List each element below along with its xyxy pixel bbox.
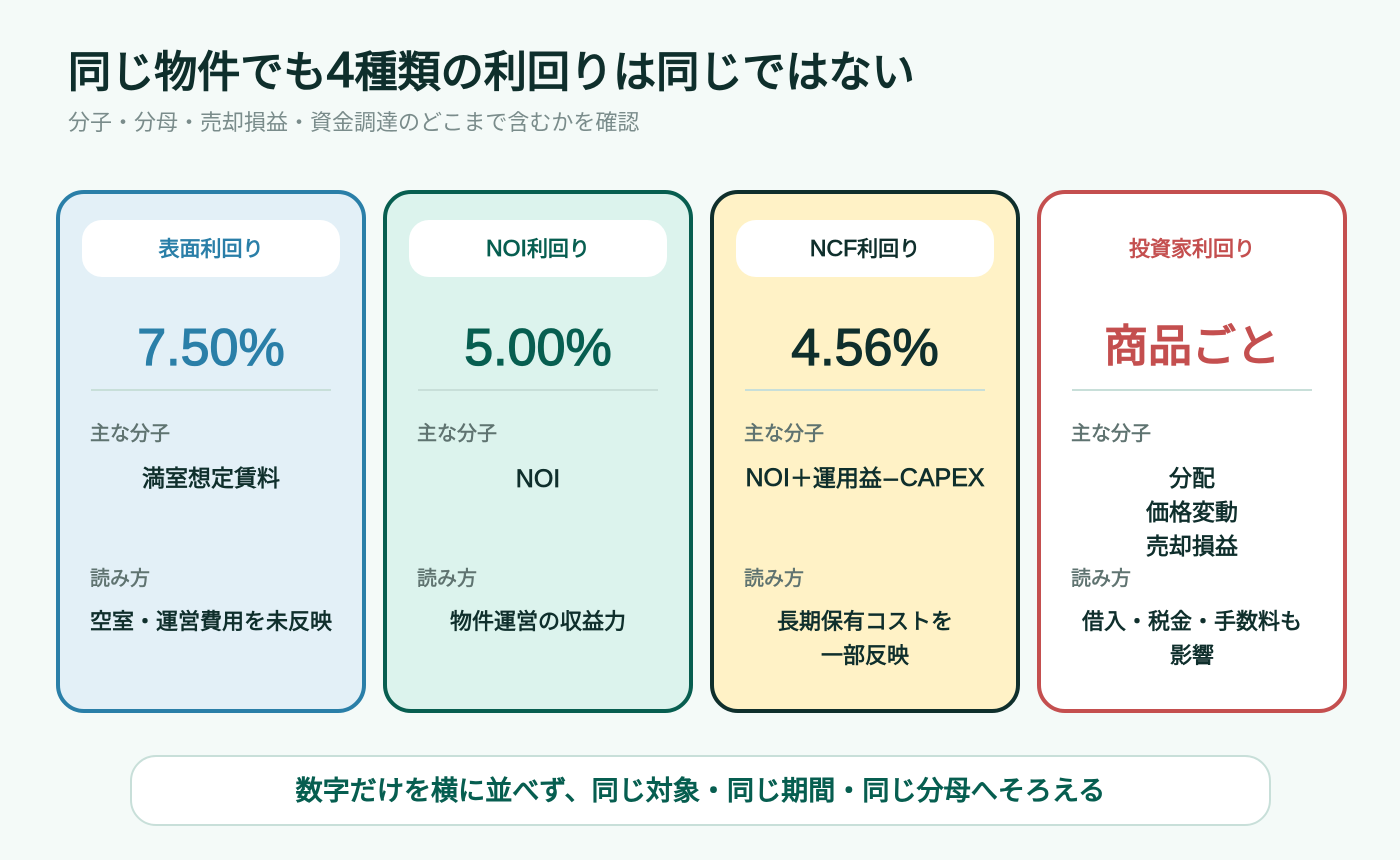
numerator value: 分配 xyxy=(1169,465,1215,491)
reading value: 物件運営の収益力 xyxy=(450,609,626,634)
pill heading xyxy=(409,220,667,277)
numerator label: 主な分子 xyxy=(90,423,170,445)
takeaway banner xyxy=(130,755,1271,826)
numerator value: 売却損益 xyxy=(1146,533,1238,559)
reading value xyxy=(777,609,953,668)
pill heading: NOI利回り xyxy=(486,235,590,261)
reading value: 借入・税金・手数料も xyxy=(1082,609,1302,634)
pill heading: 投資家利回り xyxy=(1129,238,1255,261)
reading label: 読み方 xyxy=(744,568,804,590)
reading label: 読み方 xyxy=(417,568,477,590)
pill heading xyxy=(82,220,340,277)
pill heading: NCF利回り xyxy=(810,235,920,261)
reading value: 影響 xyxy=(1170,643,1214,668)
yield value: 4.56% xyxy=(791,319,939,377)
yield value: 5.00% xyxy=(464,319,612,377)
panel: 投資家利回り xyxy=(1037,190,1347,713)
reading label: 読み方 xyxy=(90,568,150,590)
reading label: 読み方 xyxy=(1071,568,1131,590)
numerator label: 主な分子 xyxy=(417,423,497,445)
numerator value: NOI xyxy=(516,465,560,493)
yield value: 7.50% xyxy=(137,319,285,377)
subtitle: 分子・分母・売却損益・資金調達のどこまで含むかを確認 xyxy=(68,110,639,135)
pill heading xyxy=(1063,220,1321,277)
reading value: 空室・運営費用を未反映 xyxy=(90,609,332,634)
reading value: 一部反映 xyxy=(821,643,909,668)
panel: 表面利回り xyxy=(56,190,366,713)
yield value: 商品ごと xyxy=(1104,322,1280,371)
panel: NCF利回り xyxy=(710,190,1020,713)
reading value: 長期保有コストを xyxy=(777,609,953,634)
pill heading xyxy=(736,220,994,277)
reading value xyxy=(1082,609,1302,668)
takeaway banner: 数字だけを横に並べず、同じ対象・同じ期間・同じ分母へそろえる xyxy=(296,776,1105,806)
numerator value xyxy=(1146,465,1238,559)
numerator label: 主な分子 xyxy=(1071,423,1151,445)
title: 同じ物件でも4種類の利回りは同じではない xyxy=(68,42,915,98)
panel: NOI利回り xyxy=(383,190,693,713)
numerator value: NOI＋運用益–CAPEX xyxy=(745,464,985,492)
pill heading: 表面利回り xyxy=(158,238,264,261)
numerator label: 主な分子 xyxy=(744,423,824,445)
numerator value: 価格変動 xyxy=(1146,499,1238,525)
numerator value: 満室想定賃料 xyxy=(142,465,280,491)
